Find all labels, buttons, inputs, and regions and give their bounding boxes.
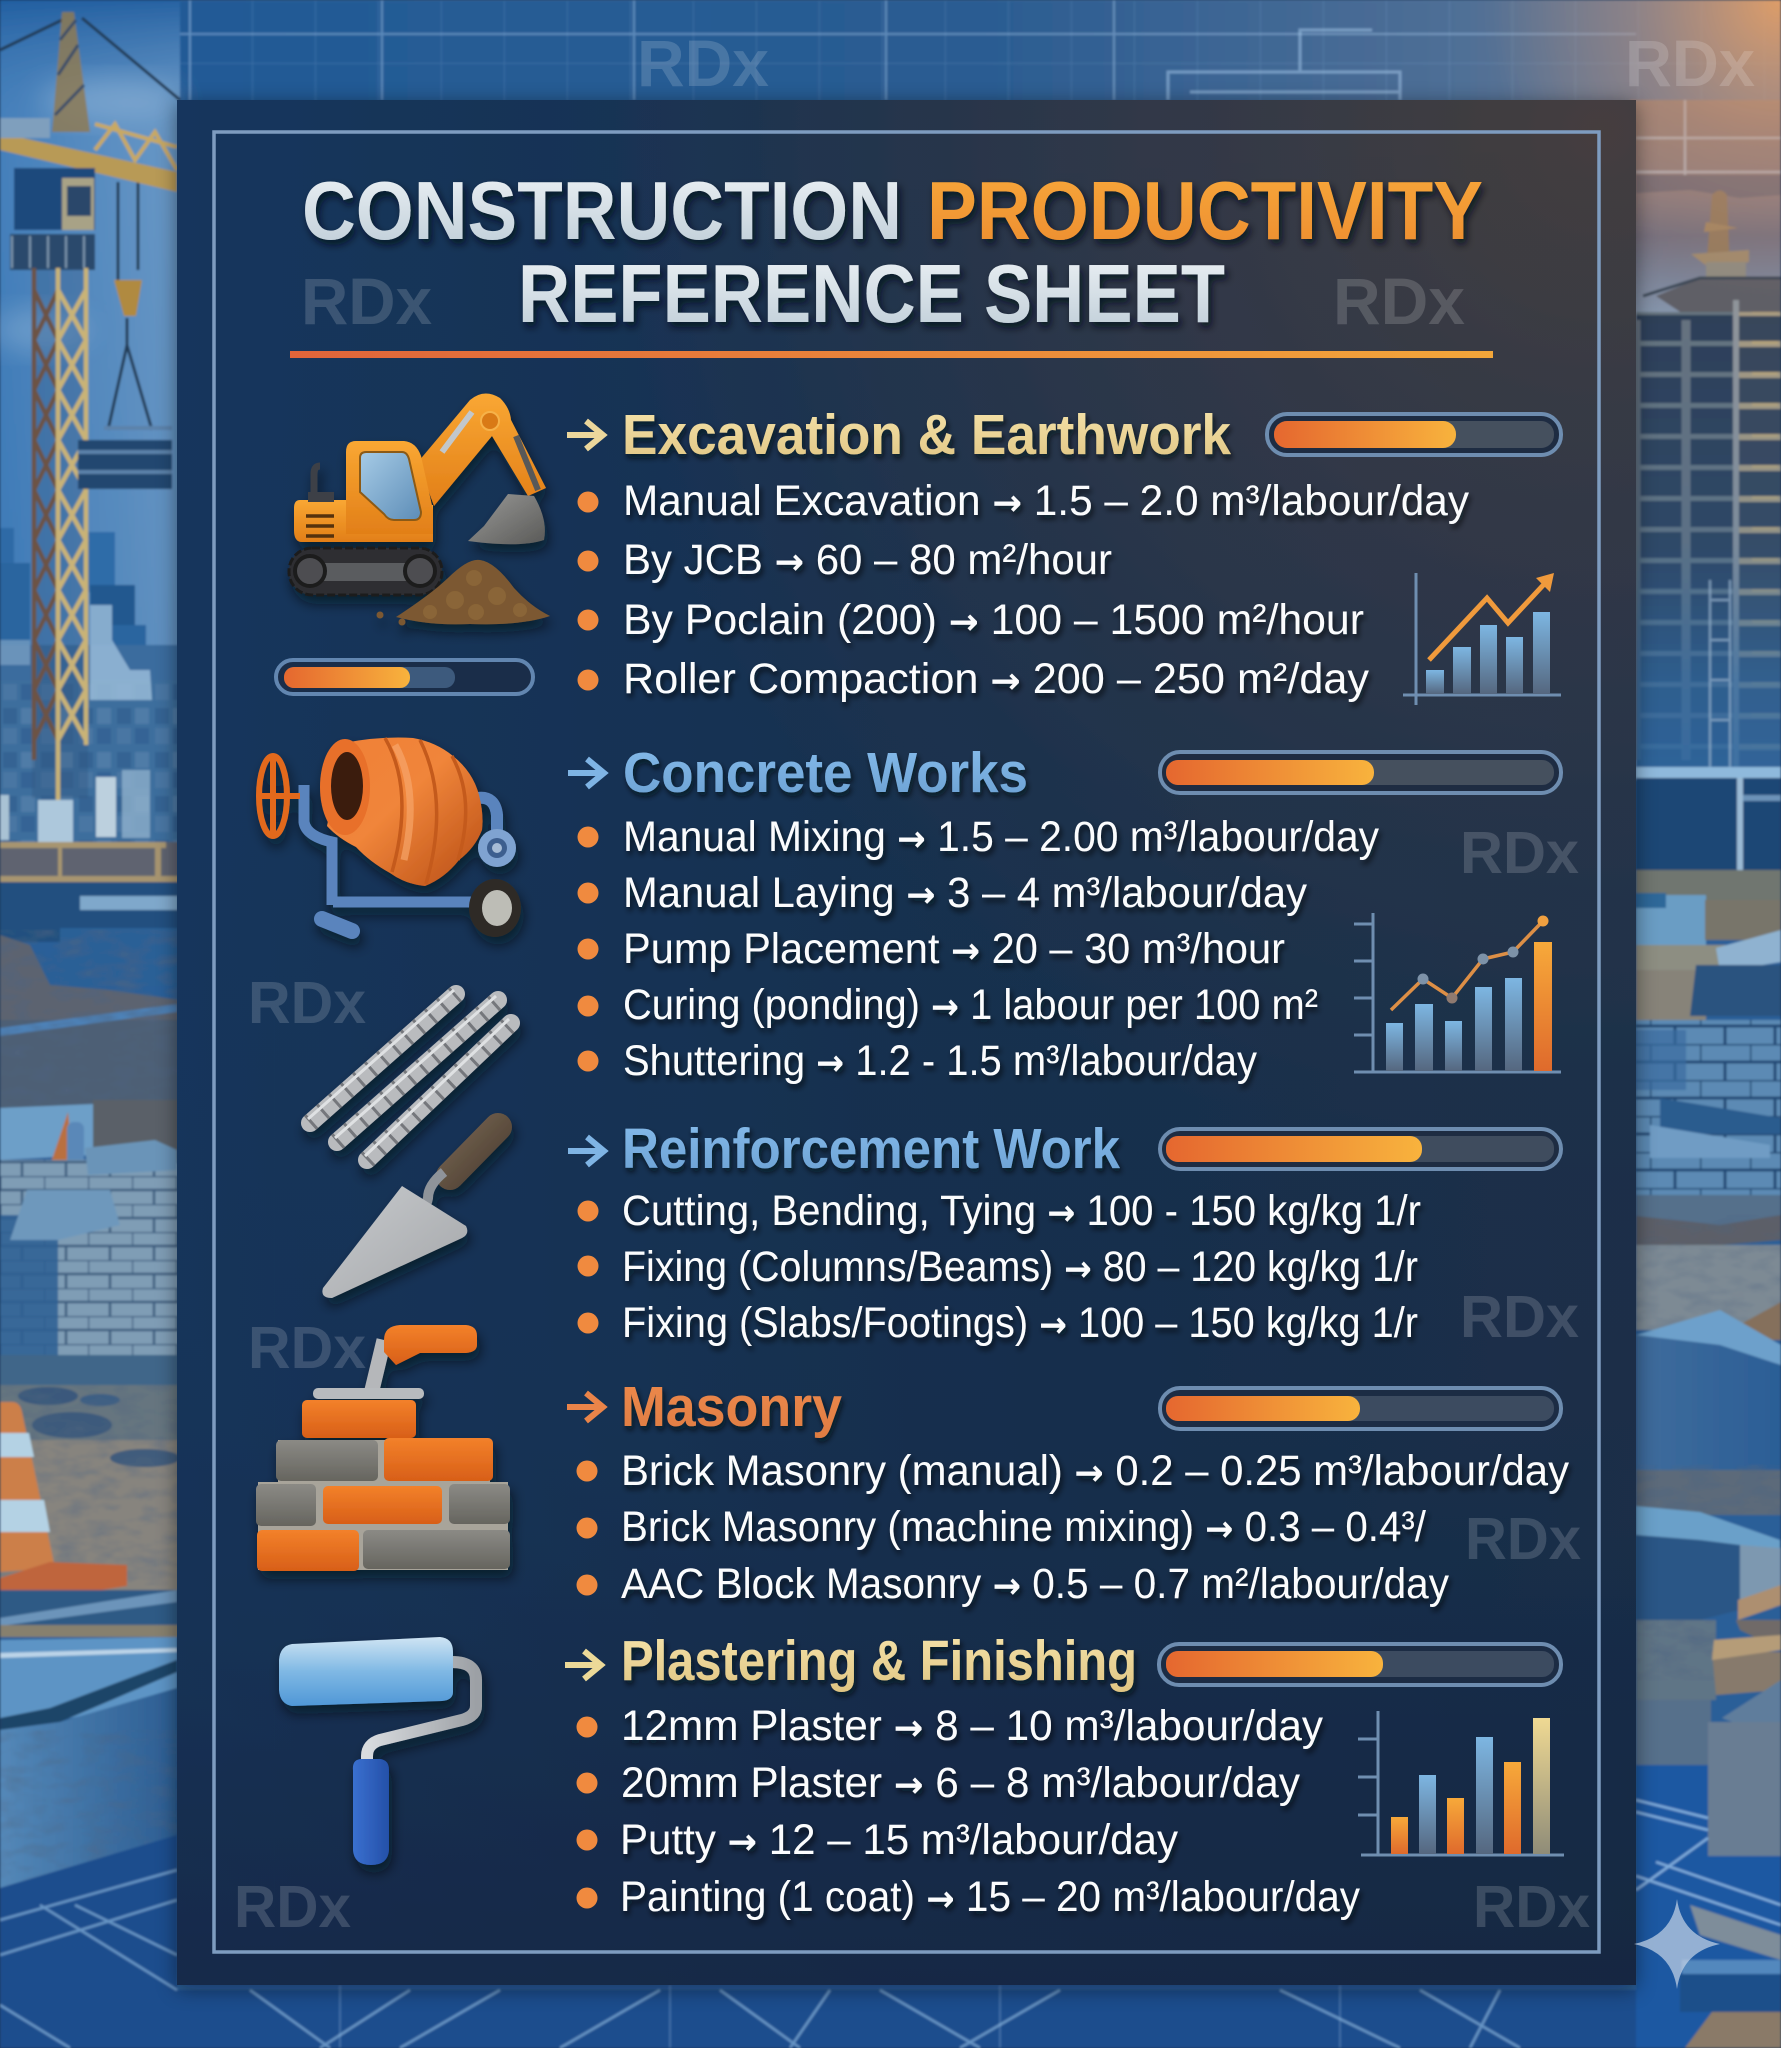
roller sleeve xyxy=(279,1637,453,1706)
progress bar xyxy=(1267,414,1561,455)
watermark: right upper: RDx xyxy=(1460,820,1579,886)
title: CONSTRUCTION xyxy=(302,164,902,257)
mixer hub xyxy=(478,829,516,867)
list: Brick Masonry (manual) → 0.2 – 0.25 m³/labour/day xyxy=(621,1447,1569,1495)
brick trowel xyxy=(372,1340,384,1390)
section: reinforcement work xyxy=(568,1117,1561,1347)
background: right sky and tower under construction xyxy=(1630,100,1781,780)
list: Fixing (Columns/Beams) → 80 – 120 kg/kg 1/r xyxy=(622,1243,1418,1291)
section: masonry xyxy=(567,1375,1569,1608)
watermark: right middle: RDx xyxy=(1460,1284,1579,1350)
mixer wheel xyxy=(469,879,521,937)
background: crane xyxy=(0,12,180,800)
list xyxy=(578,813,1379,1085)
background: top blueprint grid xyxy=(0,0,1781,140)
excavator boom xyxy=(418,393,546,506)
heading: Plastering & Finishing xyxy=(621,1629,1137,1693)
icon: paint roller xyxy=(279,1637,476,1865)
tower crown xyxy=(1656,278,1781,325)
arrow xyxy=(567,1393,603,1421)
progress bar: excavator left xyxy=(276,660,533,694)
tower body xyxy=(1636,312,1736,770)
icon: steel rebars xyxy=(308,990,511,1160)
excavator tracks xyxy=(289,548,442,595)
excavator cab xyxy=(346,441,433,534)
background: bottom blueprint floor xyxy=(0,1722,1781,2048)
section: excavation and earthwork xyxy=(567,403,1561,705)
list: Pump Placement → 20 – 30 m³/hour xyxy=(623,925,1285,973)
background: right lower site xyxy=(1636,767,1781,1856)
background: stacked stone blocks xyxy=(0,1160,180,1365)
list: Manual Excavation → 1.5 – 2.0 m³/labour/day xyxy=(623,477,1469,525)
list: Putty → 12 – 15 m³/labour/day xyxy=(620,1816,1178,1864)
watermark: title right: RDx xyxy=(1333,264,1465,338)
bricks xyxy=(302,1400,416,1438)
list: By JCB → 60 – 80 m²/hour xyxy=(623,536,1112,584)
watermark: title left: RDx xyxy=(301,264,432,338)
icon: brick wall with trowel xyxy=(256,1325,510,1571)
progress bar xyxy=(1160,1129,1561,1169)
tower spire xyxy=(1706,190,1730,270)
mixer opening xyxy=(320,739,370,835)
watermark: top center: RDx xyxy=(637,26,769,100)
background: small cone and slab xyxy=(0,1104,93,1160)
list: Manual Mixing → 1.5 – 2.00 m³/labour/day xyxy=(623,813,1379,861)
background: left lower site xyxy=(0,842,180,1888)
mixer hand wheel xyxy=(259,756,287,836)
list: Cutting, Bending, Tying → 100 - 150 kg/kg 1/r xyxy=(622,1187,1421,1235)
title underline xyxy=(290,351,1493,358)
progress bar xyxy=(1160,1388,1561,1429)
watermark: right lower: RDx xyxy=(1465,1506,1581,1572)
background: ruler and lower box xyxy=(1690,1905,1781,1960)
list: Manual Laying → 3 – 4 m³/labour/day xyxy=(623,869,1307,917)
background: sand and rocks xyxy=(0,1385,180,1445)
panel background xyxy=(177,100,1636,1985)
arrow xyxy=(565,1651,601,1679)
excavator body xyxy=(294,500,433,542)
title xyxy=(302,164,1483,340)
background: left city skyline xyxy=(0,528,180,845)
excavator window xyxy=(360,452,421,520)
chart: rising bars with arrow xyxy=(1403,573,1561,705)
background: traffic cone xyxy=(0,1402,127,1603)
section: plastering and finishing xyxy=(565,1629,1564,1921)
watermark: left middle: RDx xyxy=(248,970,366,1036)
roller grip xyxy=(353,1759,389,1865)
list: Roller Compaction → 200 – 250 m²/day xyxy=(623,655,1369,703)
list: Shuttering → 1.2 - 1.5 m³/labour/day xyxy=(623,1037,1257,1085)
watermark: left lower: RDx xyxy=(248,1315,366,1381)
background: top right warm glow xyxy=(1400,0,1781,320)
arrow xyxy=(567,421,603,449)
mixer drum xyxy=(327,738,483,886)
watermark: bottom left: RDx xyxy=(234,1874,351,1940)
trowel handle xyxy=(450,1127,498,1176)
icon: concrete mixer xyxy=(259,738,521,937)
list: AAC Block Masonry → 0.5 – 0.7 m²/labour/day xyxy=(621,1560,1449,1608)
arrow xyxy=(568,759,604,787)
excavator bucket xyxy=(468,494,545,544)
excavator exhaust xyxy=(314,466,320,494)
list xyxy=(578,1187,1421,1347)
trowel blade xyxy=(322,1186,467,1298)
icon: trowel xyxy=(322,1127,498,1298)
list: 20mm Plaster → 6 – 8 m³/labour/day xyxy=(621,1759,1300,1807)
heading: Masonry xyxy=(621,1375,842,1439)
chart: colored bars xyxy=(1358,1711,1564,1855)
mixer foot xyxy=(322,919,352,931)
list: 12mm Plaster → 8 – 10 m³/labour/day xyxy=(621,1702,1323,1750)
list: Curing (ponding) → 1 labour per 100 m² xyxy=(623,981,1318,1029)
heading: Reinforcement Work xyxy=(622,1117,1120,1181)
list xyxy=(576,1702,1360,1921)
panel inner border xyxy=(214,132,1599,1952)
mortar backing xyxy=(258,1482,508,1570)
heading: Concrete Works xyxy=(623,741,1028,805)
list xyxy=(578,477,1469,703)
roller wire xyxy=(367,1662,476,1764)
icon: sparkle star xyxy=(1634,1899,1720,1989)
list: By Poclain (200) → 100 – 1500 m²/hour xyxy=(623,596,1364,644)
mixer frame xyxy=(304,785,472,905)
icon: excavator xyxy=(289,393,550,626)
watermark: top right: RDx xyxy=(1625,26,1755,100)
heading: Excavation & Earthwork xyxy=(622,403,1231,467)
list: Brick Masonry (machine mixing) → 0.3 – 0.4³/ xyxy=(621,1503,1426,1551)
list: Painting (1 coat) → 15 – 20 m³/labour/day xyxy=(620,1873,1360,1921)
progress bar xyxy=(1159,1644,1561,1685)
list xyxy=(576,1447,1569,1608)
title: PRODUCTIVITY xyxy=(927,164,1483,257)
background: left sky xyxy=(0,0,180,760)
chart: bars with line xyxy=(1354,913,1561,1072)
watermark: bottom right: RDx xyxy=(1473,1874,1590,1940)
section: concrete works xyxy=(568,741,1561,1085)
trowel neck xyxy=(412,1172,444,1218)
soil pile xyxy=(396,560,550,624)
arrow xyxy=(568,1137,604,1165)
progress bar xyxy=(1160,752,1561,793)
list: Fixing (Slabs/Footings) → 100 – 150 kg/kg 1/r xyxy=(622,1299,1418,1347)
background: slabs and concrete block xyxy=(0,1590,180,1630)
panel: reference sheet xyxy=(177,100,1636,1985)
title: REFERENCE SHEET xyxy=(518,247,1225,340)
